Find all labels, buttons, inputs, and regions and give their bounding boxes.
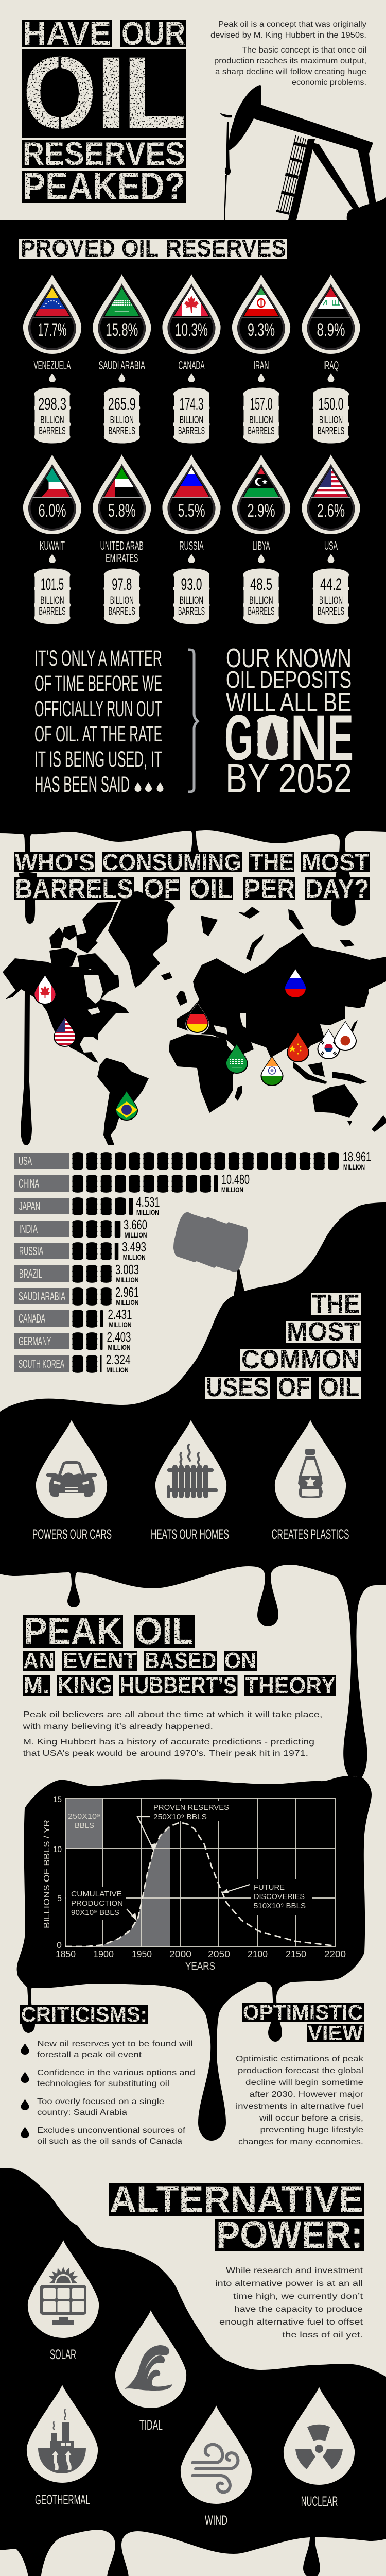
text: optimistic view: preventing huge lifestyle [260,2126,363,2134]
icon: car [46,1461,97,1497]
reserve: Libya [232,454,290,624]
title: have our oil reserves peaked: RESERVES [23,136,185,172]
chart annotations: DISCOVERIES [254,1892,305,1901]
heading: optimistic view: VIEW [308,2021,363,2045]
heading: alternative power: ALTERNATIVE [110,2179,363,2221]
icon: radiator with steam [167,1445,218,1498]
drop: Iraq share [302,274,360,354]
intro text: economic problems. [292,78,366,87]
heading: the most common uses of oil: OIL [320,1372,360,1402]
text: peak oil believers: that USA’s peak would be around 1970’s. Their peak hit in 1971. [23,1749,308,1758]
heading: peak oil an event based on m. king hubbert's theory: ON [224,1648,256,1673]
reserve: USA: USA [324,539,338,552]
heading: who's consuming the most barrels of oil per day [14,849,370,904]
chart arrows [127,1817,250,1920]
panel: alternative power black area with drips [0,2168,386,2576]
drop: Iraq share: 8.9% [317,320,345,340]
text: optimistic view: investments in alternative fuel [236,2102,363,2111]
row: Germany: 2.403 [107,1329,131,1345]
bar chart: barrels per day by country [14,1149,371,1374]
use: heats our homes: HEATS OUR HOMES [151,1527,229,1542]
heading: proved oil reserves [19,234,287,262]
heading: peak oil an event based on m. king hubbert's theory: KING [58,1672,112,1699]
chart annotations [68,1803,306,1917]
callout: gone by 2052: E [328,702,354,774]
chart annotations: PROVEN RESERVES [153,1803,229,1812]
power: geothermal: GEOTHERMAL [35,2492,90,2507]
drop: Canada share: 10.3% [175,320,208,340]
chart annotations: 250X10⁹ [68,1812,100,1821]
map flag: South Korea [317,1029,340,1059]
drop: Libya share [232,454,290,534]
power: tidal: TIDAL [139,2417,163,2433]
row: Russia [14,1239,146,1261]
map flag: India [260,1056,284,1086]
heading: alternative power: POWER: [216,2213,363,2256]
chart annotations: PRODUCTION [71,1899,123,1908]
power: nuclear [284,2387,355,2509]
x axis labels: 2000 [169,1949,191,1959]
barrel: Canada: 174.3 [179,395,204,413]
row: India: INDIA [19,1222,38,1235]
barrel: Iran [243,387,279,443]
row: Germany [14,1329,131,1351]
reserve: Venezuela [23,274,81,443]
reserve: United Arab Emirates: UNITED ARAB [100,539,144,552]
map inland seas [84,975,246,1056]
title: have our oil reserves peaked [22,15,187,208]
barrel: Iraq: 150.0 [318,395,344,413]
barrel: Venezuela: BARRELS [39,425,66,437]
icon: geothermal plant [38,2409,86,2473]
barrel: Iran: BILLION [249,414,273,426]
drop: UAE share [93,454,151,534]
row: USA: 18.961 [343,1149,371,1164]
icon: wind swirl [192,2445,238,2492]
text: peak oil believers: with many believing it’s already happened. [22,1722,213,1731]
row: Saudi Arabia: 2.961 [115,1284,139,1300]
barrel: Kuwait: BARRELS [39,605,66,617]
chart annotations: 90X10⁹ BBLS [71,1908,119,1917]
row: South Korea: 2.324 [106,1352,131,1367]
barrel: UAE: BILLION [110,595,134,606]
barrel: Iran: BARRELS [248,425,275,437]
map flag: USA [54,1016,76,1047]
row: South Korea: MILLION [106,1366,129,1374]
power: solar: SOLAR [50,2347,76,2362]
row: Japan: MILLION [136,1208,159,1216]
heading: the most common uses of oil: THE [312,1289,360,1318]
heading: who's consuming the most barrels of oil per day: PER [244,874,295,904]
reserve: Iraq [302,274,360,443]
text: peak oil believers: Peak oil believers are all about the time at which it will take place, [23,1710,322,1719]
row: Brazil: 3.003 [115,1262,139,1277]
use: powers our cars: POWERS OUR CARS [32,1527,112,1542]
barrel: Russia: BILLION [180,595,203,606]
row: Saudi Arabia: MILLION [116,1298,139,1307]
reserve: United Arab Emirates [93,454,151,624]
y axis labels: 15 [53,1794,62,1804]
barrel: Iraq [313,387,349,443]
power: tidal [115,2310,186,2433]
row: Canada: CANADA [19,1312,45,1325]
text: alternative power [215,2266,363,2340]
barrel: Venezuela [34,387,71,443]
reserve: Russia: RUSSIA [179,539,204,552]
reserve: Canada: CANADA [178,359,205,372]
row: India: MILLION [125,1231,147,1239]
heading: who's consuming the most barrels of oil per day: THE [250,849,294,875]
x axis labels: 1850 [56,1949,76,1959]
chart annotations: 510X10⁹ BBLS [254,1902,306,1910]
row: USA: MILLION [343,1163,365,1171]
reserve: Iran: IRAN [253,359,269,372]
icon: plastic bottle [298,1449,323,1498]
drop: Saudi Arabia share [93,274,151,354]
row: Russia: MILLION [123,1253,146,1261]
use: heats our homes [151,1420,229,1542]
panel: chart blob with drips [17,1776,372,2141]
x axis labels: YEARS [185,1961,215,1972]
row: Russia: 3.493 [122,1239,146,1255]
map flag: Brazil [115,1090,138,1121]
chart annotations: FUTURE [254,1883,285,1892]
row: China: CHINA [19,1177,39,1190]
intro text: Peak oil is a concept that was originally [218,20,366,29]
barrel: UAE [103,569,140,624]
callout: gone by 2052: WILL ALL BE [226,688,352,718]
list: criticisms: Excludes unconventional sources of [37,2126,186,2135]
icon: solar panel [40,2267,86,2325]
text: optimistic view: will occur before a crisis, [259,2114,363,2123]
text: only a matter of time: HAS BEEN SAID [34,772,130,797]
barrel: Saudi Arabia: BILLION [110,414,134,426]
drop: UAE share: 5.8% [108,501,136,521]
icon: radiation [295,2425,343,2469]
heading: the most common uses of oil: COMMON [241,1345,360,1374]
reserve: USA [302,454,360,624]
heading: peak oil an event based on m. king hubbert's theory: OIL [135,1611,194,1652]
barrel: Kuwait: 101.5 [41,575,64,594]
drop: Iran share [232,274,290,354]
icon: tipped grey barrel [173,1212,248,1272]
intro text: devised by M. King Hubbert in the 1950s. [210,31,366,40]
barrel: Saudi Arabia: 265.9 [108,395,136,413]
heading: proved oil reserves: OIL [121,234,159,262]
row: Japan: 4.531 [136,1194,160,1210]
list: criticisms: forestall a peak oil event [37,2050,142,2059]
heading: peak oil an event based on m. king hubbert's theory: BASED [145,1648,216,1673]
text: alternative power: time high, we currently don’t [233,2292,363,2301]
callout: gone by 2052: BY 2052 [225,755,352,801]
heading: the most common uses of oil [205,1289,361,1402]
reserve: United Arab Emirates: EMIRATES [106,551,138,565]
chart annotations: BBLS [75,1821,94,1830]
row: Canada [14,1307,132,1329]
text: only a matter of time: OF OIL. AT THE RATE [34,722,162,747]
heading: proved oil reserves: RESERVES [166,234,286,262]
reserve: Iran [232,274,290,443]
row: Germany: GERMANY [19,1334,51,1348]
chart annotations: 250X10⁹ BBLS [153,1812,207,1821]
map flag: Canada [33,974,57,1005]
y axis labels: 5 [57,1893,62,1903]
x axis labels: 2150 [286,1949,306,1959]
icon: oil pump jack [220,85,386,220]
text: peak oil believers: M. King Hubbert has a history of accurate predictions - predicting [23,1738,314,1747]
barrel: Venezuela: BILLION [40,414,64,426]
row: India [14,1217,147,1239]
text: peak oil believers [22,1710,322,1758]
barrel: Libya: 48.5 [250,575,272,594]
text: only a matter of time: IT IS BEING USED, IT [34,747,162,772]
intro text: production reaches its maximum output, [214,57,366,65]
heading: peak oil an event based on m. king hubbert's theory: EVENT [63,1648,137,1673]
row: China: 10.480 [221,1172,250,1187]
row: South Korea: SOUTH KOREA [19,1357,64,1370]
heading: who's consuming the most barrels of oil per day: BARRELS [15,874,133,904]
row: Brazil: BRAZIL [19,1267,42,1280]
row: China [14,1172,250,1194]
x axis labels: 2100 [248,1949,268,1959]
reserve: Kuwait: KUWAIT [40,539,65,552]
reserve: Venezuela: VENEZUELA [34,359,71,372]
row: Russia: RUSSIA [19,1244,43,1258]
y axis labels [43,1794,62,1950]
world map [3,891,386,1145]
list: criticisms: technologies for substituting oil [37,2079,169,2088]
x axis labels: 1900 [93,1949,114,1959]
drop: Libya share: 2.9% [248,501,275,521]
reserve: Saudi Arabia: SAUDI ARABIA [99,359,145,372]
heading: who's consuming the most barrels of oil per day: WHO'S [15,849,95,875]
drop: Saudi Arabia share: 15.8% [106,320,138,340]
list: criticisms: Too overly focused on a single [37,2097,164,2106]
barrel: Iran: 157.0 [250,395,273,413]
barrel: Canada [173,387,210,443]
callout: gone by 2052: O [256,702,289,774]
title: have our oil reserves peaked: I [95,36,127,149]
barrel: Russia: BARRELS [178,605,205,617]
barrel: UAE: BARRELS [109,605,135,617]
drop: USA share: 2.6% [317,501,345,521]
heading: peak oil an event based on m. king hubbert's theory: AN [23,1648,55,1673]
text: only a matter of time: IT’S ONLY A MATTER [34,646,162,671]
text: optimistic view: changes for many economies. [238,2138,363,2146]
barrel: USA: 44.2 [320,575,342,594]
barrel: Iraq: BILLION [319,414,343,426]
text: optimistic view: Optimistic estimations of peak [236,2055,364,2063]
row: Brazil: MILLION [116,1276,139,1284]
heading: who's consuming the most barrels of oil per day: MOST [302,849,369,875]
list: criticisms: oil such as the oil sands of Canada [37,2137,182,2146]
drop: Venezuela share [23,274,81,354]
power: wind [181,2405,252,2528]
chart: hubbert peak curve [43,1794,346,1972]
heading: who's consuming the most barrels of oil per day: DAY? [305,874,369,904]
chart arrowheads [131,1843,229,1921]
barrel: UAE: 97.8 [112,575,132,594]
bracket [188,650,198,792]
heading: peak oil an event based on m. king hubbert's theory: THEORY [245,1672,336,1699]
heading: peak oil an event based on m. king hubbert's theory: HUBBERT’S [120,1672,237,1699]
icon: wave [125,2345,172,2391]
barrel: Libya [243,569,279,624]
heading: criticisms: CRITICISMS: [21,2003,147,2026]
text: only a matter of time: OFFICIALLY RUN OUT [34,697,162,721]
barrel: USA [313,569,349,624]
x axis labels [56,1949,346,1972]
barrel: Libya: BILLION [249,595,273,606]
list: criticisms: Confidence in the various options and [37,2069,195,2077]
drop: Venezuela share: 17.7% [38,320,67,340]
heading: peak oil an event based on m. king hubbert's theory: PEAK [24,1611,122,1652]
row: Germany: MILLION [108,1343,131,1351]
map flag: Germany [185,1002,209,1035]
heading: the most common uses of oil: USES [206,1372,269,1402]
list: criticisms: country: Saudi Arabia [37,2108,127,2117]
row: China: MILLION [221,1185,243,1194]
callout: gone by 2052: OIL DEPOSITS [226,666,352,693]
text: alternative power: enough alternative fuel to offset [219,2318,363,2327]
x axis labels: 1950 [132,1949,152,1959]
reserve: Kuwait [23,454,81,624]
text: only a matter of time [34,646,164,797]
barrel: Iraq: BARRELS [318,425,344,437]
barrel: Libya: BARRELS [248,605,275,617]
row: Saudi Arabia [14,1284,139,1307]
heading: optimistic view [242,2001,364,2045]
heading: optimistic view: OPTIMISTIC [243,2001,363,2024]
drop: Russia share [162,454,221,534]
text: alternative power: have the capacity to produce [234,2305,363,2314]
row: South Korea [14,1352,131,1374]
row: Canada: 2.431 [108,1307,132,1322]
x axis labels: 2200 [324,1949,346,1959]
power: solar [28,2240,99,2362]
heading: peak oil an event based on m. king hubbert's theory [23,1611,336,1699]
barrel: Venezuela: 298.3 [38,395,66,413]
map flag: Russia [285,969,306,997]
dashed curve [65,1822,335,1946]
y axis labels: BILLIONS OF BBLS / YR [43,1820,51,1928]
barrel: Kuwait: BILLION [40,595,64,606]
row: Brazil [14,1262,139,1284]
heading: who's consuming the most barrels of oil per day: OIL [190,874,233,904]
text: optimistic view: after 2030. However major [249,2090,364,2099]
intro text: a sharp decline will follow creating huge [215,67,366,76]
title: have our oil reserves peaked: O [23,36,97,149]
row: USA [14,1149,371,1171]
reserve: Saudi Arabia [93,274,151,443]
callout: gone by 2052: G [224,702,253,774]
panel: common uses of oil black area with drips [0,1202,386,1777]
barrel: USA: BILLION [319,595,343,606]
text: optimistic view [236,2055,364,2146]
drop: Canada share [162,274,221,354]
label knockouts [66,1801,312,1920]
barrel: Canada: BILLION [180,414,203,426]
drop: USA share [302,454,360,534]
list: criticisms: New oil reserves yet to be found will [37,2040,192,2048]
heading: proved oil reserves: PROVED [21,234,115,262]
map flag: Japan [334,1021,357,1051]
power: wind: WIND [205,2513,227,2528]
barrel: Russia: 93.0 [181,575,202,594]
barrel: Russia [173,569,210,624]
barrel: Canada: BARRELS [178,425,205,437]
power: geothermal [27,2385,98,2507]
title: have our oil reserves peaked: L [122,36,187,149]
text: optimistic view: production forecast the global [238,2066,363,2075]
heading: alternative power [109,2179,364,2256]
title: have our oil reserves peaked: OUR [121,15,185,52]
row: Japan: JAPAN [19,1199,40,1213]
heading: who's consuming the most barrels of oil per day: OF [144,874,180,904]
text: only a matter of time: OF TIME BEFORE WE [34,671,162,696]
text: optimistic view: decline will begin sometime [245,2078,363,2087]
reserve: Libya: LIBYA [252,539,270,552]
row: India: 3.660 [124,1217,147,1232]
y axis labels: 10 [53,1844,62,1854]
heading: the most common uses of oil: MOST [287,1317,360,1346]
reserve: Russia [162,454,221,624]
map flag: Saudi Arabia [225,1043,248,1074]
intro text [210,20,366,87]
chart annotations: CUMULATIVE [71,1890,122,1899]
row: Saudi Arabia: SAUDI ARABIA [19,1290,65,1303]
panel: proved oil reserves black band with drips [0,220,386,926]
y axis labels: 0 [57,1940,62,1950]
drop: Iran share: 9.3% [248,320,275,340]
callout: gone by 2052 [224,643,354,801]
heading: peak oil an event based on m. king hubbert's theory: M. [23,1672,49,1699]
heading: who's consuming the most barrels of oil per day: CONSUMING [102,849,241,875]
chart grey fills [65,1799,170,1947]
text: alternative power: While research and investment [226,2266,363,2275]
drop: Russia share: 5.5% [178,501,205,521]
reserve: Iraq: IRAQ [323,359,339,372]
row: Japan [14,1194,160,1216]
callout: gone by 2052: N [290,702,327,774]
barrel: Kuwait [34,569,71,624]
map flag: China [287,1032,309,1062]
title: have our oil reserves peaked: HAVE [23,15,111,52]
text: alternative power: into alternative power is at an all [215,2279,363,2288]
barrel: USA: BARRELS [318,605,344,617]
barrel: Saudi Arabia: BARRELS [109,425,135,437]
power: nuclear: NUCLEAR [301,2494,338,2509]
intro text: The basic concept is that once oil [242,46,366,55]
heading: the most common uses of oil: OF [278,1372,310,1402]
drop: Kuwait share: 6.0% [39,501,66,521]
use: creates plastics [272,1420,349,1542]
use: powers our cars [32,1420,112,1542]
row: USA: USA [19,1154,32,1167]
drop: Kuwait share [23,454,81,534]
title: have our oil reserves peaked: PEAKED? [23,165,185,208]
barrel: Saudi Arabia [103,387,140,443]
list: criticisms [21,2040,195,2146]
reserve: Canada [162,274,221,443]
x axis labels: 2050 [208,1949,230,1959]
row: Canada: MILLION [109,1320,132,1329]
text: alternative power: the loss of oil yet. [282,2331,363,2340]
